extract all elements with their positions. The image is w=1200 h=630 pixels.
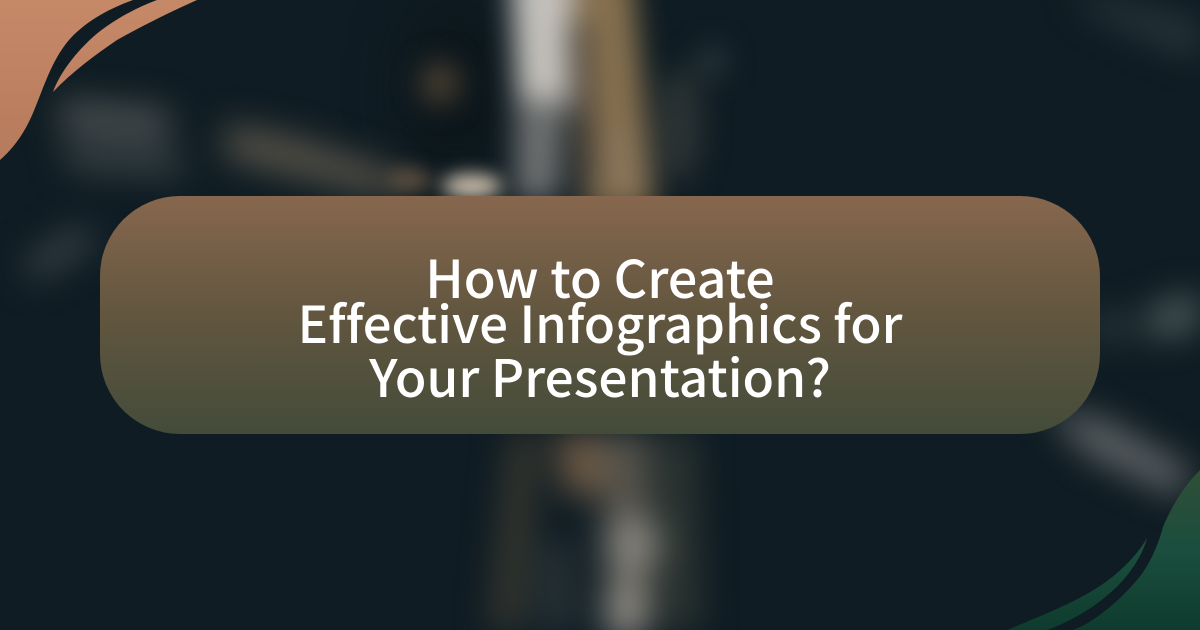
corner: top-left orange wave bbox=[0, 0, 197, 160]
title: Your Presentation? bbox=[369, 337, 831, 412]
title: Effective Infographics for bbox=[298, 284, 902, 358]
title: How to Create bbox=[425, 238, 775, 313]
title panel bbox=[100, 196, 1100, 434]
corner: bottom-right green wave bbox=[1007, 470, 1200, 630]
